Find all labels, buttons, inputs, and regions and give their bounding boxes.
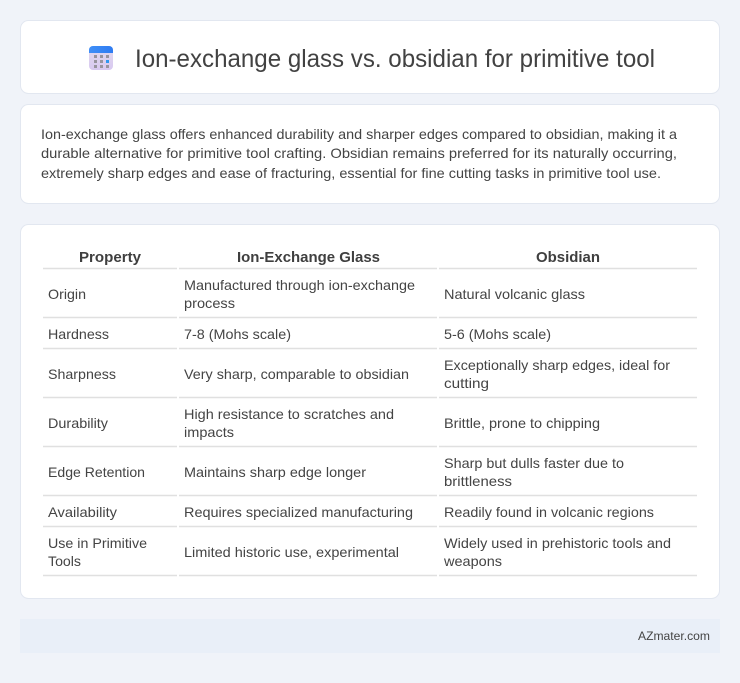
row: origin: Natural volcanic glass xyxy=(444,286,585,302)
row: hardness xyxy=(48,326,551,342)
row: availability: Readily found in volcanic regions xyxy=(444,504,654,520)
row: hardness: Hardness xyxy=(48,326,109,342)
row: hardness: 5-6 (Mohs scale) xyxy=(444,326,551,342)
table header xyxy=(79,249,600,266)
row: origin: Origin xyxy=(48,286,86,302)
row: sharpness: cutting xyxy=(444,375,489,391)
row: availability: Requires specialized manufacturing xyxy=(184,504,413,520)
intro text: durable alternative for primitive tool crafting. Obsidian remains preferred for its naturally occurring, xyxy=(41,145,677,161)
row: edge retention: Sharp but dulls faster due to xyxy=(444,455,624,471)
row: edge retention: Maintains sharp edge longer xyxy=(184,464,366,480)
panel: comparison table xyxy=(20,224,720,598)
icon: calendar xyxy=(89,46,113,70)
intro text xyxy=(41,126,677,181)
row: sharpness: Exceptionally sharp edges, ideal for xyxy=(444,357,670,373)
row: origin: Manufactured through ion-exchange xyxy=(184,277,415,293)
row: origin: process xyxy=(184,295,235,311)
row: availability: Availability xyxy=(48,504,117,520)
row: use in primitive tools: Tools xyxy=(48,553,81,569)
row: hardness: 7-8 (Mohs scale) xyxy=(184,326,291,342)
panel: title card xyxy=(20,20,720,94)
intro text: Ion-exchange glass offers enhanced durability and sharper edges compared to obsidian, making it a xyxy=(41,126,677,142)
row: availability xyxy=(48,504,654,520)
row: use in primitive tools: Widely used in prehistoric tools and xyxy=(444,535,671,551)
table header: Obsidian xyxy=(536,249,600,266)
row: edge retention xyxy=(48,455,624,489)
row: sharpness: Very sharp, comparable to obsidian xyxy=(184,366,409,382)
row: sharpness: Sharpness xyxy=(48,366,116,382)
row: durability xyxy=(48,406,600,440)
row: use in primitive tools: weapons xyxy=(443,553,502,569)
row: use in primitive tools: Limited historic use, experimental xyxy=(184,544,399,560)
table header: Property xyxy=(79,249,142,266)
row: edge retention: brittleness xyxy=(444,473,512,489)
title: Ion-exchange glass vs. obsidian for primitive tool xyxy=(135,45,655,73)
row: durability: Durability xyxy=(48,415,108,431)
row: durability: High resistance to scratches and xyxy=(184,406,394,422)
panel: introduction xyxy=(20,104,720,204)
row: edge retention: Edge Retention xyxy=(48,464,145,480)
table header: Ion-Exchange Glass xyxy=(237,249,380,266)
row: use in primitive tools: Use in Primitive xyxy=(48,535,147,551)
intro text: extremely sharp edges and ease of fracturing, essential for fine cutting tasks in primitive tool use. xyxy=(41,165,661,181)
footer: AZmater.com xyxy=(638,629,710,643)
footer xyxy=(20,619,720,653)
row: use in primitive tools xyxy=(48,535,671,569)
row: origin xyxy=(48,277,585,311)
row: sharpness xyxy=(48,357,670,391)
row: durability: Brittle, prone to chipping xyxy=(444,415,600,431)
row: durability: impacts xyxy=(184,424,234,440)
